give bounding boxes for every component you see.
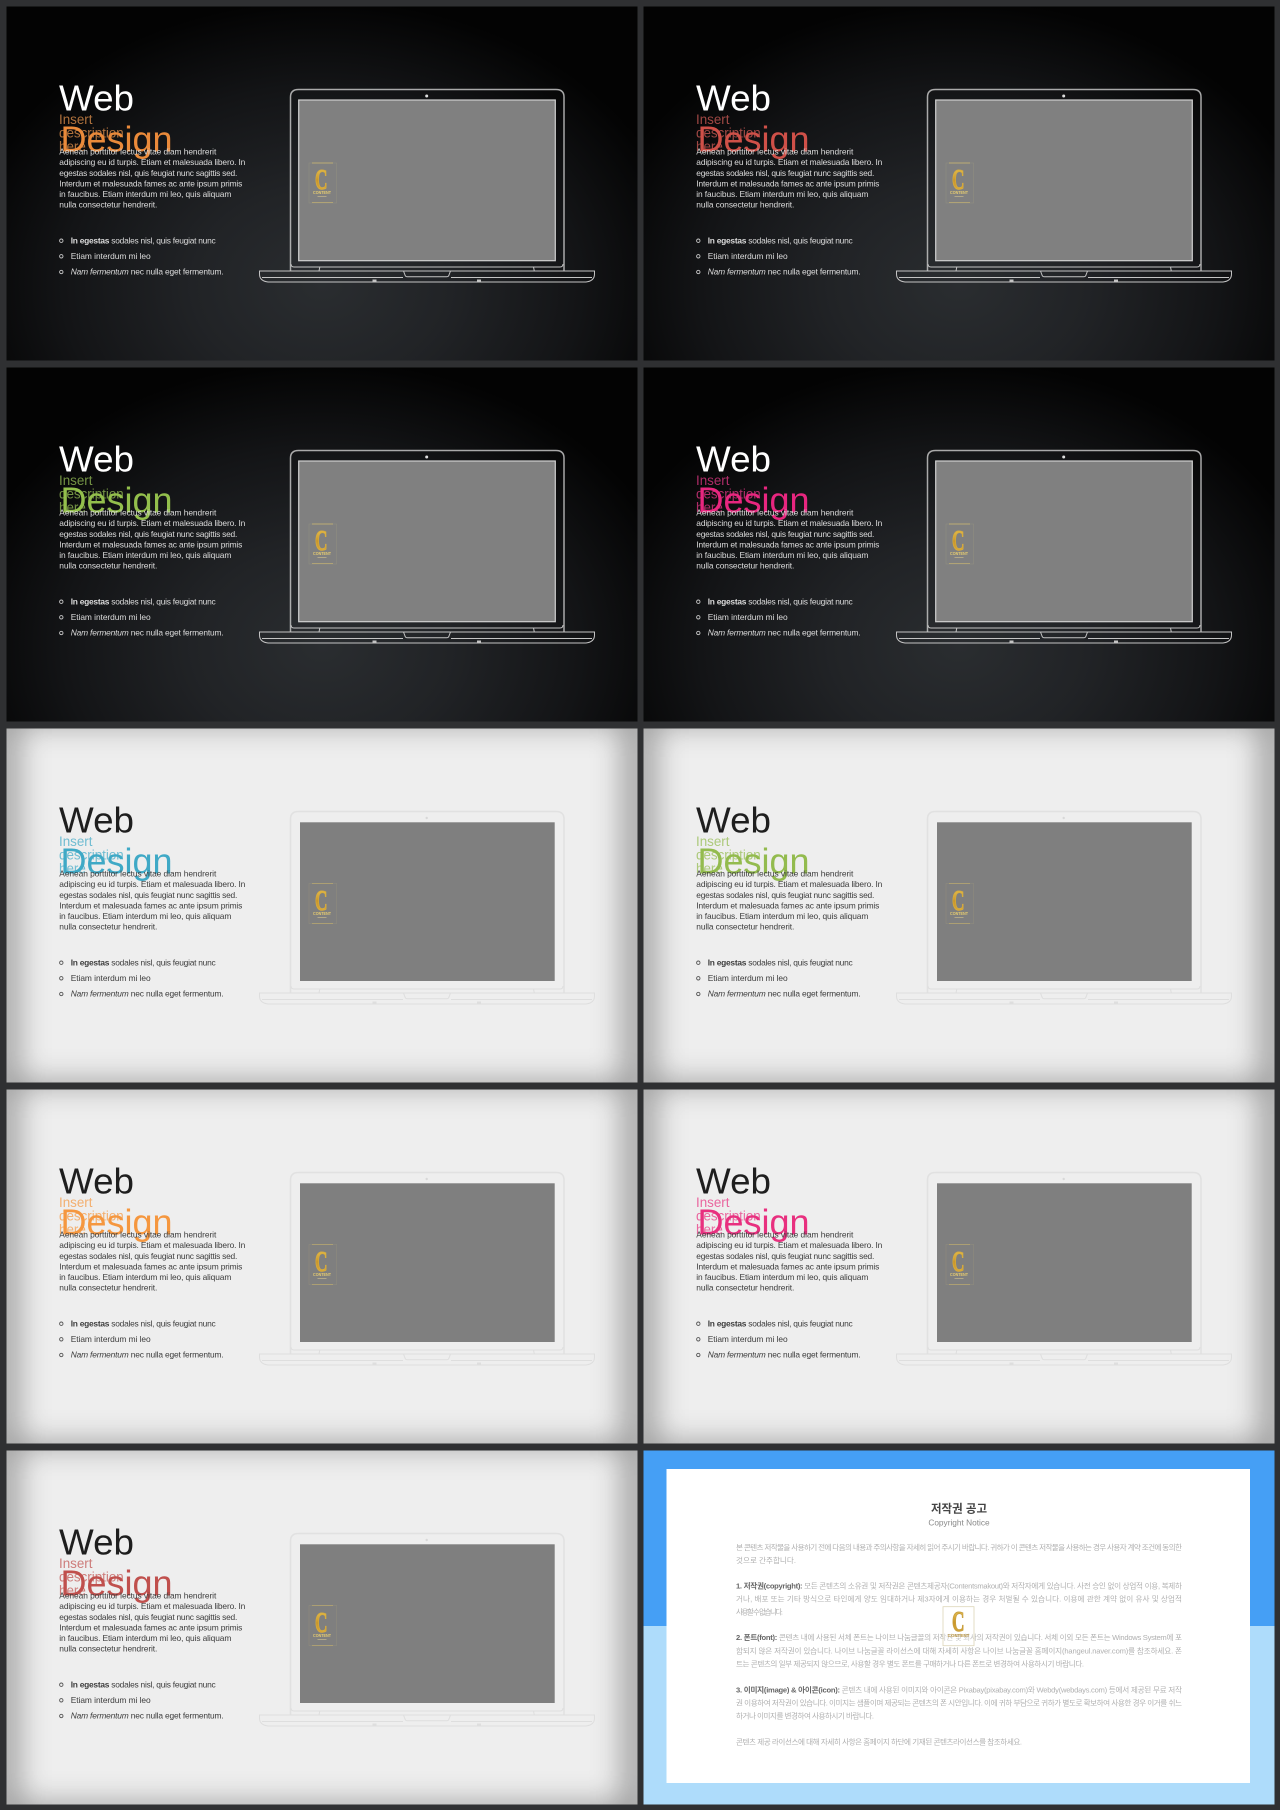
- intro paragraph: 것으로 간주합니다.: [736, 1555, 796, 1565]
- body paragraph: [696, 1230, 883, 1293]
- bullet list: Nam fermentum nec nulla eget fermentum.: [708, 628, 861, 638]
- laptop illustration: [260, 1172, 594, 1365]
- subtitle: insert description here: [59, 1556, 124, 1598]
- title: Web: Web: [696, 439, 771, 480]
- body paragraph: adipiscing eu id turpis. Etiam et malesuada libero. In: [59, 157, 246, 167]
- body paragraph: Aenean porttitor lectus vitae diam hendrerit: [696, 508, 854, 518]
- body paragraph: nulla consectetur hendrerit.: [696, 1283, 794, 1293]
- subtitle: insert description here: description: [59, 848, 124, 862]
- body paragraph: egestas sodales nisl, quis feugiat nunc sagittis sed.: [696, 168, 874, 178]
- intro paragraph: [736, 1542, 1182, 1565]
- body paragraph: nulla consectetur hendrerit.: [59, 200, 157, 210]
- body paragraph: Interdum et malesuada fames ac ante ipsum primis: [59, 1261, 242, 1271]
- bullet list: Nam fermentum nec nulla eget fermentum.: [71, 628, 224, 638]
- body paragraph: nulla consectetur hendrerit.: [696, 200, 794, 210]
- body paragraph: Aenean porttitor lectus vitae diam hendrerit: [59, 1590, 217, 1600]
- body paragraph: in faucibus. Etiam interdum mi leo, quis aliquam: [696, 911, 868, 921]
- body paragraph: egestas sodales nisl, quis feugiat nunc sagittis sed.: [696, 529, 874, 539]
- body paragraph: nulla consectetur hendrerit.: [59, 561, 157, 571]
- subheading: Copyright Notice: Copyright Notice: [928, 1518, 990, 1528]
- subtitle: insert description here: description: [696, 848, 761, 862]
- body paragraph: Aenean porttitor lectus vitae diam hendrerit: [696, 868, 854, 878]
- closing note: 콘텐츠 제공 라이선스에 대해 자세히 사항은 홈페이지 하단에 기재된 콘텐츠라이선스를 참조하세요.: [736, 1736, 1022, 1746]
- panel: slide 6 light green: [641, 710, 1274, 1096]
- subtitle: insert description here: description: [59, 126, 124, 140]
- body paragraph: adipiscing eu id turpis. Etiam et malesuada libero. In: [696, 1240, 883, 1250]
- laptop illustration: [896, 90, 1232, 282]
- panel: slide 8 light pink: [641, 1071, 1274, 1458]
- body paragraph: [59, 1590, 246, 1654]
- bullet list: Etiam interdum mi leo: [708, 1334, 788, 1344]
- section 3: images and icons: 3. 이미지(image) & 아이콘(icon): 콘텐츠 내에 사용된 이미지와 아이콘은 Pixabay(pixabay.com)와 Webdy(webdays.com) 등에서 제공된 무료 저작: [736, 1685, 1182, 1695]
- subtitle: insert description here: [696, 1195, 761, 1237]
- body paragraph: Aenean porttitor lectus vitae diam hendrerit: [59, 508, 217, 518]
- body paragraph: Interdum et malesuada fames ac ante ipsum primis: [59, 178, 242, 188]
- body paragraph: Interdum et malesuada fames ac ante ipsum primis: [696, 178, 879, 188]
- bullet list: Nam fermentum nec nulla eget fermentum.: [71, 1711, 224, 1721]
- logo badge: [946, 524, 974, 564]
- logo badge: [309, 1244, 337, 1284]
- body paragraph: Interdum et malesuada fames ac ante ipsum primis: [696, 539, 879, 549]
- body paragraph: in faucibus. Etiam interdum mi leo, quis aliquam: [59, 550, 231, 560]
- body paragraph: [59, 1230, 246, 1293]
- bullet list: Nam fermentum nec nulla eget fermentum.: [71, 267, 224, 277]
- panel: copyright notice slide: [644, 1450, 1274, 1804]
- heading: copyright notice: 저작권 공고: [931, 1502, 987, 1516]
- bullet list: Nam fermentum nec nulla eget fermentum.: [71, 989, 224, 999]
- section 2: fonts: 트는 콘텐츠의 일부 제공되지 않으므로, 사용할 경우 별도 폰트를 구매하거나 다른 폰트로 변경하여 사용하시기 바랍니다.: [736, 1658, 1084, 1668]
- body paragraph: in faucibus. Etiam interdum mi leo, quis aliquam: [59, 189, 231, 199]
- subtitle: insert description here: description: [59, 1570, 124, 1584]
- section 3: images and icons: 하거나 이미지를 변경하여 사용하시기 바랍니다.: [736, 1710, 874, 1720]
- body paragraph: [59, 146, 246, 210]
- body paragraph: [59, 868, 246, 932]
- bullet list: Etiam interdum mi leo: [71, 1695, 151, 1705]
- title: Web: Web: [696, 1161, 771, 1202]
- bullet list: Etiam interdum mi leo: [708, 612, 788, 622]
- bullet list: [60, 236, 224, 277]
- section 1: copyright: 거나, 배포 또는 기타 방식으로 타인에게 양도 임대하거나 제3자에게 이용하는 경우 처벌될 수 있습니다. 이용에 관한 계약 없이 유사 및 상업적: [736, 1594, 1182, 1604]
- logo badge: C: [952, 885, 964, 917]
- section 1: copyright: 사용할 수 없습니다.: [736, 1608, 783, 1617]
- body paragraph: in faucibus. Etiam interdum mi leo, quis aliquam: [59, 1633, 231, 1643]
- subtitle: insert description here: Insert: [696, 473, 730, 488]
- bullet list: In egestas sodales nisl, quis feugiat nunc: [71, 596, 216, 606]
- body paragraph: egestas sodales nisl, quis feugiat nunc sagittis sed.: [59, 1612, 237, 1622]
- subtitle: insert description here: here: [59, 1583, 86, 1598]
- body paragraph: [59, 508, 246, 571]
- body paragraph: adipiscing eu id turpis. Etiam et malesuada libero. In: [696, 518, 883, 528]
- body paragraph: Aenean porttitor lectus vitae diam hendrerit: [59, 1230, 217, 1240]
- bullet list: Etiam interdum mi leo: [71, 612, 151, 622]
- title: Web: Web: [59, 800, 134, 841]
- logo badge: C: [952, 525, 964, 557]
- bullet list: In egestas sodales nisl, quis feugiat nunc: [71, 1318, 216, 1328]
- title: Design: Design: [698, 1202, 810, 1243]
- body paragraph: egestas sodales nisl, quis feugiat nunc sagittis sed.: [59, 1251, 237, 1261]
- laptop illustration: [260, 450, 594, 643]
- body paragraph: in faucibus. Etiam interdum mi leo, quis aliquam: [696, 1272, 868, 1282]
- body paragraph: [696, 868, 883, 932]
- body paragraph: Interdum et malesuada fames ac ante ipsum primis: [59, 900, 242, 910]
- bullet list: In egestas sodales nisl, quis feugiat nunc: [708, 1318, 853, 1328]
- subtitle: insert description here: Insert: [59, 1556, 93, 1571]
- logo badge: C: [315, 1246, 328, 1278]
- bullet list: Nam fermentum nec nulla eget fermentum.: [71, 1350, 224, 1360]
- bullet list: Etiam interdum mi leo: [708, 973, 788, 983]
- subtitle: insert description here: [696, 112, 761, 154]
- body paragraph: [696, 146, 883, 210]
- panel: slide 9 light red: [4, 1432, 638, 1810]
- logo badge: [946, 884, 974, 924]
- body paragraph: Aenean porttitor lectus vitae diam hendrerit: [696, 146, 854, 156]
- panel: slide 4 dark pink: [644, 368, 1274, 722]
- logo badge: [309, 884, 337, 924]
- logo badge: CONTENT: [313, 1272, 331, 1277]
- bullet list: Nam fermentum nec nulla eget fermentum.: [708, 989, 861, 999]
- subtitle: insert description here: Insert: [59, 834, 93, 849]
- title: Design: Design: [60, 841, 172, 882]
- logo badge: CONTENT: [950, 911, 968, 916]
- body paragraph: egestas sodales nisl, quis feugiat nunc sagittis sed.: [59, 890, 237, 900]
- bullet list: [697, 958, 861, 999]
- logo badge: CONTENT: [948, 1633, 970, 1638]
- subtitle: insert description here: [59, 473, 124, 515]
- section 3: images and icons: [736, 1685, 1182, 1720]
- subtitle: insert description here: [59, 1195, 124, 1237]
- intro paragraph: 본 콘텐츠 저작물을 사용하기 전에 다음의 내용과 주의사항을 자세히 읽어 주시기 바랍니다. 귀하가 이 콘텐츠 저작물을 사용하는 경우 사용자 계약 조건에 동의한: [736, 1542, 1182, 1552]
- logo badge: C: [315, 164, 328, 196]
- logo badge: C: [952, 1607, 964, 1638]
- panel: slide 5 light teal: [4, 710, 638, 1096]
- title: Web: Web: [696, 800, 771, 841]
- title: Design: Design: [60, 1202, 172, 1243]
- bullet list: In egestas sodales nisl, quis feugiat nunc: [71, 1680, 216, 1690]
- body paragraph: adipiscing eu id turpis. Etiam et malesuada libero. In: [59, 879, 246, 889]
- body paragraph: Interdum et malesuada fames ac ante ipsum primis: [59, 539, 242, 549]
- body paragraph: egestas sodales nisl, quis feugiat nunc sagittis sed.: [59, 168, 237, 178]
- body paragraph: Interdum et malesuada fames ac ante ipsum primis: [696, 1261, 879, 1271]
- logo badge: CONTENT: [313, 1633, 331, 1638]
- bullet list: [60, 1318, 224, 1360]
- bullet list: Etiam interdum mi leo: [71, 251, 151, 261]
- body paragraph: Aenean porttitor lectus vitae diam hendrerit: [59, 868, 217, 878]
- body paragraph: Interdum et malesuada fames ac ante ipsum primis: [696, 900, 879, 910]
- panel: slide 2 dark red: [644, 6, 1274, 360]
- logo badge: [946, 163, 974, 203]
- bullet list: Nam fermentum nec nulla eget fermentum.: [708, 267, 861, 277]
- title: Design: Design: [60, 480, 172, 521]
- title: Design: Design: [60, 119, 172, 160]
- body paragraph: nulla consectetur hendrerit.: [59, 1644, 157, 1654]
- logo badge: C: [952, 164, 964, 196]
- section 1: copyright: 1. 저작권(copyright): 모든 콘텐츠의 소유권 및 저작권은 콘텐츠제공자(Contentsmakout)와 저작자에게 있습니다. 사전 승인 없이 상업적 이용, 복제하: [736, 1580, 1182, 1590]
- body paragraph: Aenean porttitor lectus vitae diam hendrerit: [696, 1230, 854, 1240]
- section 3: images and icons: 권 이용하여 저작권이 있습니다. 이미지는 샘플이며 제공되는 콘텐츠의 폰 시안입니다. 이에 귀하 부담으로 귀하가 별도로 확보하여 사용한 경우 이거를 쉬느: [736, 1697, 1182, 1707]
- subtitle: insert description here: [696, 473, 761, 515]
- logo badge: CONTENT: [313, 911, 331, 916]
- section 2: fonts: [736, 1632, 1182, 1668]
- laptop illustration: [260, 1534, 594, 1726]
- logo badge: CONTENT: [950, 190, 968, 195]
- bullet list: [60, 1680, 224, 1721]
- panel: slide 1 dark orange: [6, 6, 638, 360]
- logo badge: [943, 1607, 974, 1646]
- logo badge: CONTENT: [950, 551, 968, 556]
- bullet list: In egestas sodales nisl, quis feugiat nunc: [708, 236, 853, 246]
- logo badge: [946, 1244, 974, 1284]
- laptop illustration: [896, 812, 1232, 1004]
- logo badge: CONTENT: [313, 551, 331, 556]
- subtitle: insert description here: here: [696, 500, 723, 515]
- bullet list: Etiam interdum mi leo: [708, 251, 788, 261]
- subtitle: insert description here: description: [696, 486, 761, 502]
- body paragraph: in faucibus. Etiam interdum mi leo, quis aliquam: [59, 911, 231, 921]
- body paragraph: in faucibus. Etiam interdum mi leo, quis aliquam: [59, 1272, 231, 1282]
- body paragraph: adipiscing eu id turpis. Etiam et malesuada libero. In: [59, 1601, 246, 1611]
- subtitle: insert description here: Insert: [696, 1195, 730, 1210]
- body paragraph: Aenean porttitor lectus vitae diam hendrerit: [59, 146, 217, 156]
- subtitle: insert description here: here: [696, 139, 723, 154]
- title: Web: Web: [59, 78, 134, 119]
- logo badge: [309, 524, 337, 564]
- subtitle: insert description here: description: [59, 1208, 124, 1224]
- bullet list: Nam fermentum nec nulla eget fermentum.: [708, 1350, 861, 1360]
- body paragraph: nulla consectetur hendrerit.: [59, 1283, 157, 1293]
- subtitle: insert description here: here: [59, 500, 86, 515]
- title: Design: Design: [698, 841, 810, 882]
- laptop illustration: [896, 1172, 1232, 1365]
- body paragraph: adipiscing eu id turpis. Etiam et malesuada libero. In: [696, 879, 883, 889]
- title: Web: Web: [59, 1161, 134, 1202]
- section 1: copyright: [736, 1580, 1182, 1617]
- bullet list: [697, 1318, 861, 1360]
- subtitle: insert description here: description: [59, 486, 124, 502]
- body paragraph: Interdum et malesuada fames ac ante ipsum primis: [59, 1622, 242, 1632]
- subtitle: insert description here: [696, 834, 761, 876]
- bullet list: [60, 596, 224, 638]
- subtitle: insert description here: here: [59, 861, 86, 876]
- subtitle: insert description here: Insert: [59, 112, 93, 127]
- title: Design: Design: [60, 1563, 172, 1604]
- bullet list: In egestas sodales nisl, quis feugiat nunc: [708, 958, 853, 968]
- body paragraph: [696, 508, 883, 571]
- subtitle: insert description here: Insert: [59, 473, 93, 488]
- subtitle: insert description here: Insert: [696, 112, 730, 127]
- subtitle: insert description here: here: [696, 1222, 723, 1237]
- logo badge: CONTENT: [313, 190, 331, 195]
- logo badge: CONTENT: [950, 1272, 968, 1277]
- bullet list: Etiam interdum mi leo: [71, 973, 151, 983]
- bullet list: In egestas sodales nisl, quis feugiat nunc: [71, 958, 216, 968]
- logo badge: [309, 163, 337, 203]
- logo badge: C: [952, 1246, 964, 1278]
- section 2: fonts: 함되지 않은 저작권이 있습니다. 나이브 나눔글꼴 라이선스에 대해 자세히 사항은 나이브 나눔글꼴 홈페이지(hangeul.naver.com)를 참조하세요. 폰: [736, 1645, 1182, 1655]
- bullet list: [60, 958, 224, 999]
- body paragraph: nulla consectetur hendrerit.: [59, 922, 157, 932]
- subtitle: insert description here: description: [696, 126, 761, 140]
- logo badge: [309, 1606, 337, 1646]
- laptop illustration: [896, 450, 1232, 643]
- body paragraph: adipiscing eu id turpis. Etiam et malesuada libero. In: [696, 157, 883, 167]
- title: Web: Web: [59, 439, 134, 480]
- subtitle: insert description here: here: [59, 1222, 86, 1237]
- laptop illustration: [260, 90, 594, 282]
- logo badge: C: [315, 525, 328, 557]
- subtitle: insert description here: description: [696, 1208, 761, 1224]
- subtitle: insert description here: Insert: [696, 834, 730, 849]
- bullet list: [697, 596, 861, 638]
- laptop illustration: [260, 812, 594, 1004]
- body paragraph: adipiscing eu id turpis. Etiam et malesuada libero. In: [59, 1240, 246, 1250]
- bullet list: In egestas sodales nisl, quis feugiat nunc: [708, 596, 853, 606]
- body paragraph: in faucibus. Etiam interdum mi leo, quis aliquam: [696, 189, 868, 199]
- body paragraph: egestas sodales nisl, quis feugiat nunc sagittis sed.: [696, 1251, 874, 1261]
- section 2: fonts: 2. 폰트(font): 콘텐츠 내에 사용된 서체 폰트는 나이브 나눔글꼴의 저작권 및 회사의 저작권이 있습니다. 서체 이외 모든 폰트는 Windows System에 포: [736, 1632, 1182, 1642]
- subtitle: insert description here: [59, 834, 124, 876]
- subtitle: insert description here: here: [696, 861, 723, 876]
- bullet list: [697, 236, 861, 277]
- title: Web: Web: [59, 1522, 134, 1563]
- subtitle: insert description here: here: [59, 139, 86, 154]
- logo badge: C: [315, 1607, 328, 1639]
- subtitle: insert description here: [59, 112, 124, 154]
- panel: slide 3 dark green: [6, 368, 638, 722]
- panel: slide 7 light orange: [4, 1071, 638, 1458]
- body paragraph: nulla consectetur hendrerit.: [696, 922, 794, 932]
- body paragraph: nulla consectetur hendrerit.: [696, 561, 794, 571]
- bullet list: Etiam interdum mi leo: [71, 1334, 151, 1344]
- body paragraph: egestas sodales nisl, quis feugiat nunc sagittis sed.: [59, 529, 237, 539]
- logo badge: C: [315, 885, 328, 917]
- title: Web: Web: [696, 78, 771, 119]
- subtitle: insert description here: Insert: [59, 1195, 93, 1210]
- title: Design: Design: [698, 119, 810, 160]
- title: Design: Design: [698, 480, 810, 521]
- body paragraph: in faucibus. Etiam interdum mi leo, quis aliquam: [696, 550, 868, 560]
- body paragraph: adipiscing eu id turpis. Etiam et malesuada libero. In: [59, 518, 246, 528]
- body paragraph: egestas sodales nisl, quis feugiat nunc sagittis sed.: [696, 890, 874, 900]
- bullet list: In egestas sodales nisl, quis feugiat nunc: [71, 236, 216, 246]
